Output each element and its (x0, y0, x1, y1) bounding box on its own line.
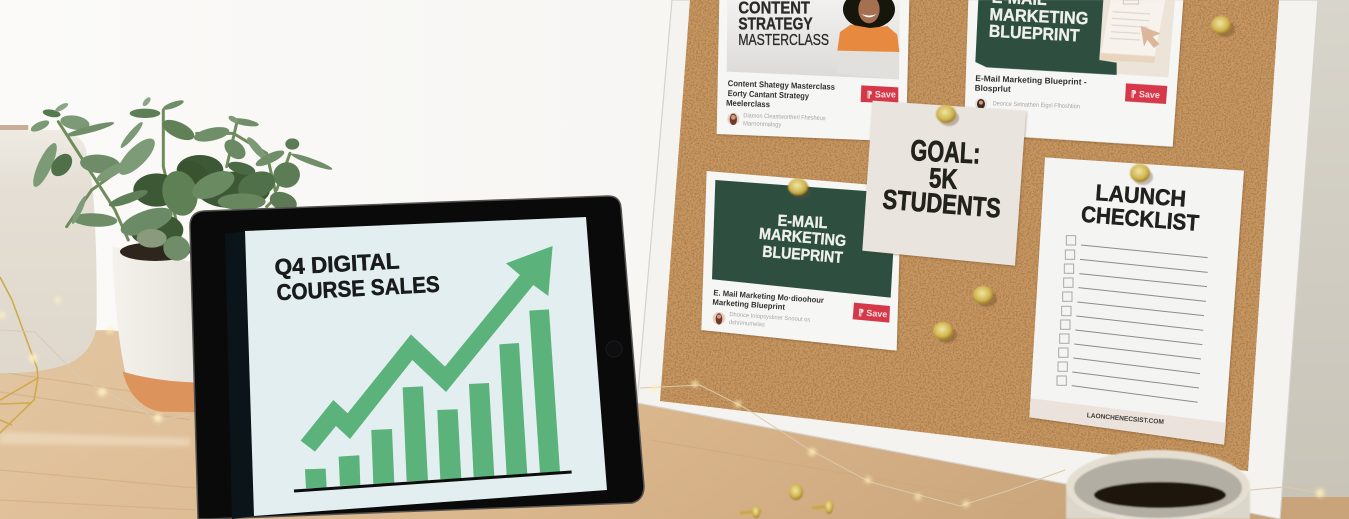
author text: Dhonce Iniopsystiner Snoout os (729, 312, 810, 324)
gold push pins on table (740, 484, 834, 518)
push pins on board (788, 16, 1235, 343)
chart baseline (294, 472, 572, 491)
card caption (712, 288, 824, 314)
card: e-mail marketing blueprint lower (701, 171, 901, 351)
author text: Deonce Setnathen Eigsl Flhoshtion (993, 100, 1081, 110)
author text (729, 312, 810, 332)
goal text: 5K (928, 162, 958, 195)
card heading (758, 213, 847, 267)
checklist footer url: LAONCHENECSIST.COM (1086, 412, 1165, 426)
goal text: GOAL: (910, 134, 981, 171)
chart heading: COURSE SALES (276, 271, 440, 305)
left vase (0, 125, 97, 373)
save button: ⁋ Save (867, 90, 896, 100)
coffee surface (1094, 482, 1226, 508)
tablet (190, 196, 644, 519)
card heading: E-MAIL (777, 213, 828, 232)
card heading: STRATEGY (738, 13, 813, 33)
chart bars (305, 309, 560, 488)
wooden table (0, 330, 1349, 519)
coffee cup (1066, 450, 1250, 519)
tablet body (190, 196, 644, 519)
author avatar (727, 113, 739, 125)
save button (1125, 83, 1167, 104)
card caption (726, 78, 836, 111)
save button (853, 303, 890, 323)
card heading: BLUEPRINT (762, 244, 844, 267)
chart heading (274, 245, 440, 305)
card image panel (727, 0, 900, 79)
chart heading: Q4 DIGITAL (274, 247, 400, 280)
tablet screen (245, 217, 607, 516)
card caption: Blosprlut (975, 83, 1011, 94)
card caption: Meelerclass (726, 98, 771, 109)
author avatar (975, 98, 987, 110)
author text: Diamon Cleastwortherl Fhesheus (743, 112, 826, 122)
card heading (738, 0, 829, 49)
author text: Marnonmalsgy (743, 120, 782, 129)
goal text: STUDENTS (882, 183, 1002, 224)
card caption: E-Mail Marketing Blueprint - (975, 73, 1087, 87)
card heading: BLUEPRINT (988, 21, 1080, 45)
right wall (1270, 0, 1349, 500)
right string lights (640, 381, 1324, 507)
sales chart (274, 245, 572, 491)
card: e-mail marketing blueprint top (964, 0, 1183, 147)
card heading (988, 0, 1089, 45)
author text (743, 112, 826, 130)
card caption: E. Mail Marketing Mo·dioohour (713, 288, 824, 305)
cork board surface (650, 0, 1290, 480)
plant stems (58, 110, 290, 240)
save button: ⁋ Save (1131, 89, 1160, 100)
card heading: MASTERCLASS (738, 32, 829, 49)
card heading: MARKETING (989, 4, 1089, 28)
save button (861, 85, 898, 103)
green image panel (975, 0, 1117, 75)
jade plant (29, 96, 333, 263)
beige image panel (1097, 0, 1175, 77)
rising trend arrow (301, 246, 553, 452)
left string lights (0, 297, 190, 422)
author text: dshrimumelas (729, 320, 765, 328)
plant pot (113, 242, 200, 412)
card heading: MARKETING (758, 226, 847, 250)
gold geometric ornament (0, 277, 38, 433)
green image panel (712, 180, 897, 298)
laptop (837, 52, 899, 79)
checklist footer band (1029, 398, 1226, 445)
shaded foliage mass (130, 155, 270, 247)
checklist title (1080, 179, 1200, 236)
card caption: Content Shategy Masterclass (728, 78, 836, 92)
save button: ⁋ Save (858, 307, 888, 319)
plant leaves (29, 96, 333, 263)
white frame of pin board (637, 0, 1318, 519)
goal sticky note (862, 101, 1026, 266)
card caption (975, 73, 1087, 97)
card caption: Marketing Blueprint (712, 298, 786, 312)
launch checklist sheet (1029, 157, 1244, 445)
presenter portrait (837, 0, 899, 52)
checklist title: LAUNCH (1095, 179, 1187, 212)
checklist title: CHECKLIST (1080, 201, 1200, 236)
goal text (882, 134, 1002, 224)
document illustration (1100, 0, 1165, 63)
tablet camera (606, 341, 622, 357)
author avatar (713, 312, 725, 325)
card caption: Eorty Cantant Strategy (728, 88, 810, 101)
checkboxes and lines (1057, 236, 1208, 402)
card: content strategy masterclass (717, 0, 909, 142)
